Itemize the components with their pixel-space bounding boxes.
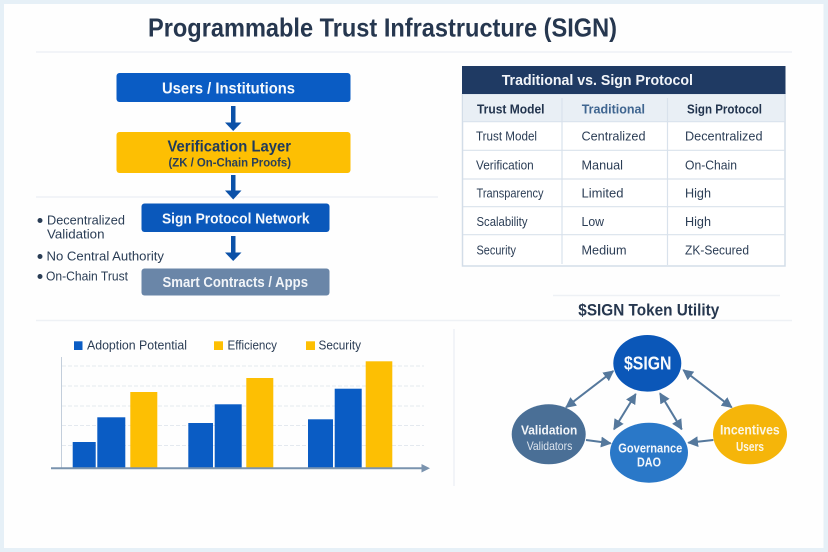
table title bar: Traditional vs. Sign Protocol: [502, 72, 693, 89]
heading: token utility: $SIGN Token Utility: [578, 302, 720, 320]
table row: scalability: Low: [582, 214, 605, 229]
node: $SIGN: [613, 335, 681, 392]
table row: trust model: [476, 129, 762, 144]
panel: comparison table: [462, 66, 786, 266]
table row: security: ZK-Secured: [685, 242, 749, 257]
chart legend: Efficiency: [228, 338, 277, 352]
table row: security: Security: [476, 243, 517, 257]
arrows: token relationships: [566, 370, 732, 443]
bars: group 1: [73, 392, 157, 468]
table row: trust model: Centralized: [582, 129, 646, 144]
table row: verification: [476, 157, 737, 172]
title: Programmable Trust Infrastructure (SIGN): [148, 12, 617, 42]
box: smart contracts and apps: [142, 268, 330, 296]
node: governance: DAO: [637, 456, 661, 470]
box: verification layer: [116, 132, 350, 173]
table column headers: [463, 94, 784, 122]
node: validation: Validation: [521, 423, 577, 438]
box: sign protocol network: [142, 204, 330, 232]
table row: scalability: High: [685, 214, 711, 229]
box: smart contracts and apps: Smart Contracts / Apps: [162, 275, 308, 291]
chart legend: Security: [318, 338, 361, 352]
bars: group 3: [308, 361, 392, 468]
box: users and institutions: Users / Institutions: [162, 80, 295, 97]
table column headers: Trust Model: [477, 101, 544, 116]
table row: trust model: Trust Model: [476, 130, 537, 144]
panel: flow diagram: [116, 73, 350, 296]
table row: verification: Verification: [476, 158, 534, 172]
text block: network properties: Decentralized: [47, 212, 125, 227]
arrow: chart x axis: [51, 464, 430, 472]
text block: network properties: No Central Authority: [46, 248, 164, 263]
table row: scalability: [476, 214, 711, 229]
table row: transparency: Limited: [582, 186, 624, 201]
table title bar: [462, 66, 786, 94]
table row: scalability: Scalability: [476, 215, 528, 229]
table row: verification: Manual: [582, 157, 623, 172]
arrow: network to smart contracts: [225, 236, 242, 261]
box: users and institutions: [116, 73, 350, 102]
box: verification layer: Verification Layer: [168, 138, 291, 156]
table row: transparency: [476, 186, 711, 201]
text block: network properties: [38, 212, 164, 283]
panel: token utility diagram: [512, 335, 787, 483]
bar chart: [51, 338, 430, 472]
bars: group 2: [188, 378, 273, 468]
box: sign protocol network: Sign Protocol Network: [162, 210, 310, 228]
node: governance: [610, 423, 688, 483]
text block: network properties: Validation: [47, 227, 104, 242]
table column headers: Traditional: [582, 101, 645, 116]
table row: transparency: High: [685, 186, 711, 201]
box: verification layer: (ZK / On-Chain Proofs): [168, 156, 291, 170]
node: incentives: Incentives: [720, 423, 780, 438]
text block: network properties: On-Chain Trust: [46, 268, 128, 283]
table row: transparency: Transparency: [476, 187, 544, 201]
node: validation: [512, 404, 586, 464]
table row: security: [476, 242, 749, 257]
arrow: users to verification: [225, 106, 242, 131]
node: validation: Validators: [527, 439, 572, 453]
table row: verification: On-Chain: [685, 157, 737, 172]
node: $SIGN: $SIGN: [624, 353, 672, 373]
node: governance: Governance: [618, 441, 682, 455]
chart legend: [74, 338, 361, 352]
table row: trust model: Decentralized: [685, 129, 762, 144]
arrow: verification to network: [225, 175, 242, 200]
table row: security: Medium: [582, 242, 626, 257]
node: incentives: [713, 404, 787, 464]
table column headers: Sign Protocol: [687, 101, 762, 116]
chart legend: Adoption Potential: [87, 338, 187, 352]
node: incentives: Users: [736, 439, 764, 454]
